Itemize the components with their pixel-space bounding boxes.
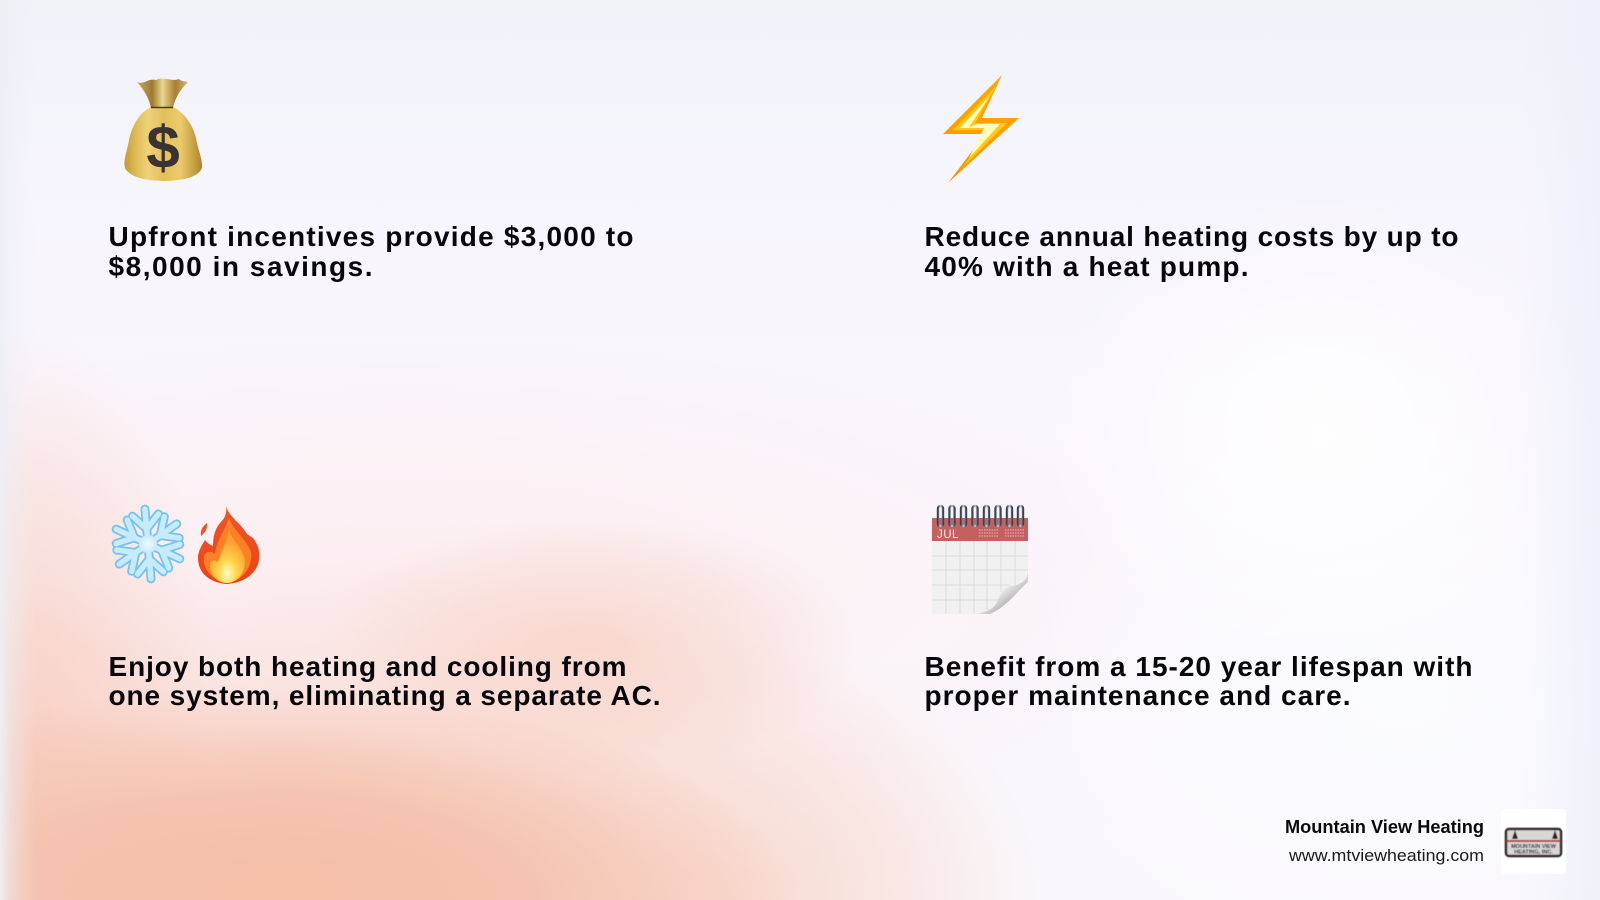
text: heating and cooling: Enjoy both heating and cooling from [108,651,626,682]
logo badge [1501,809,1566,874]
icon: calendar [932,506,1028,614]
icon: lightning bolt [943,75,1019,183]
text: upfront incentives: $8,000 in savings. [108,251,372,282]
text: upfront incentives [108,221,634,282]
icon: calendar: JUL [937,529,959,541]
icon: money bag [124,79,202,181]
text: lifespan: proper maintenance and care. [924,680,1350,711]
logo badge: HEATING, INC. [1514,850,1553,856]
text: lifespan [924,651,1472,711]
text: lifespan: Benefit from a 15-20 year lifespan with [924,651,1472,682]
icon: flame [198,506,259,584]
text: reduce heating costs: Reduce annual heating costs by up to [924,221,1458,252]
text: heating and cooling: one system, eliminating a separate AC. [108,680,660,711]
icon: snowflake [111,508,185,580]
footer brand text: www.mtviewheating.com [1288,846,1484,865]
footer brand text [1285,817,1484,865]
footer brand text: Mountain View Heating [1285,817,1484,837]
icon: money bag: $ [146,114,180,181]
logo badge: MOUNTAIN VIEW [1511,844,1557,850]
text: upfront incentives: Upfront incentives provide $3,000 to [108,221,634,252]
text: reduce heating costs [924,221,1458,282]
text: heating and cooling [108,651,660,711]
text: reduce heating costs: 40% with a heat pump. [924,251,1248,282]
